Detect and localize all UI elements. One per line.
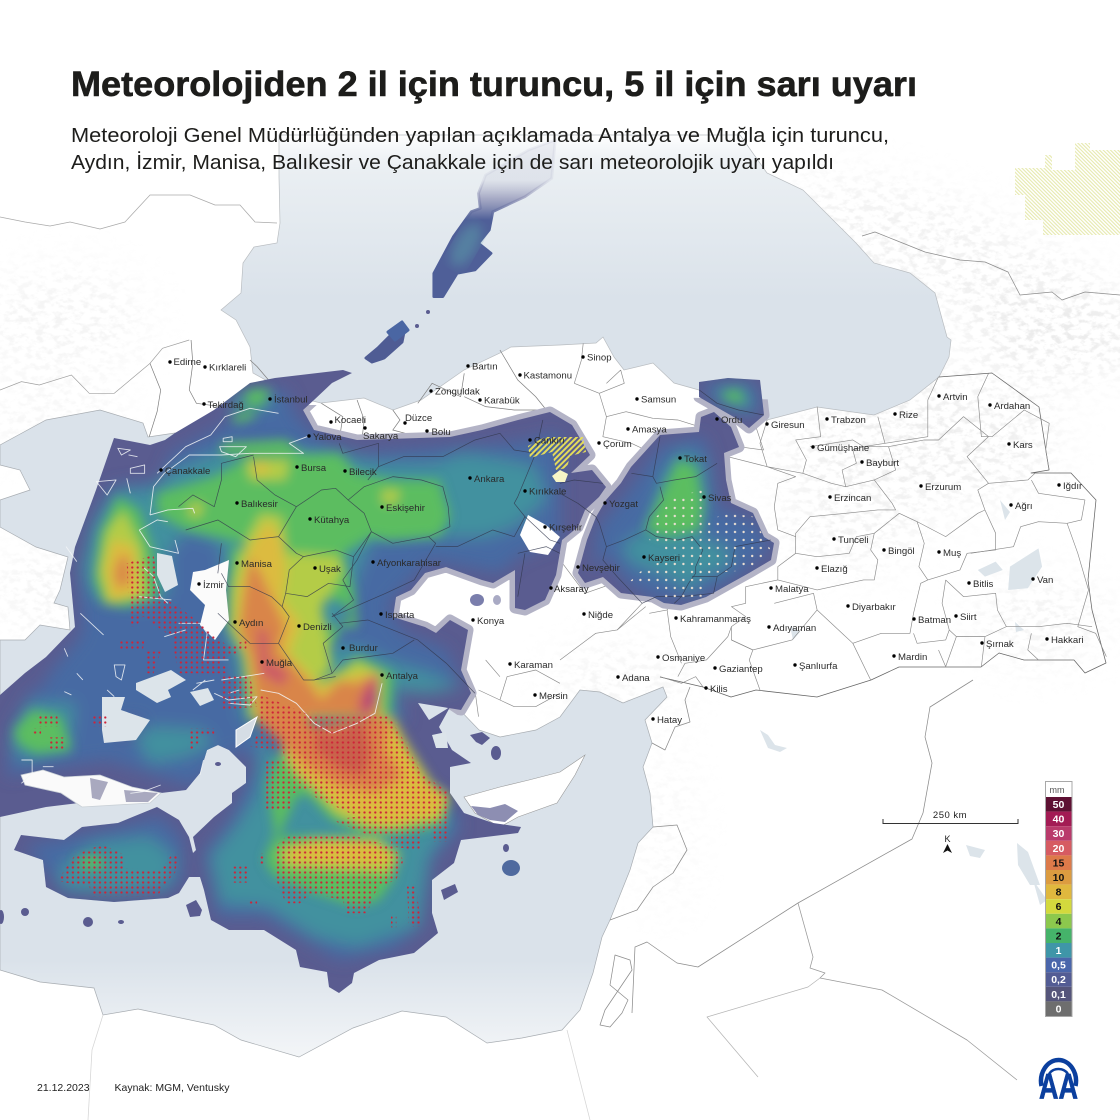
city labels: Erzurum — [925, 482, 961, 493]
city labels: Ordu — [721, 415, 742, 426]
city labels: Isparta — [385, 610, 415, 621]
central dry gap — [520, 515, 560, 555]
city labels: Kastamonu — [524, 370, 572, 382]
legend: precipitation scale in mm: 8 — [1056, 887, 1062, 899]
eastern province borders — [560, 343, 1106, 690]
city labels: Batman — [918, 615, 951, 626]
city labels: Bingöl — [888, 546, 915, 557]
city labels: Bayburt — [866, 458, 899, 469]
city labels: Karabük — [484, 396, 520, 406]
AA logo: AA — [1039, 1068, 1078, 1106]
city labels: Siirt — [960, 612, 977, 623]
city labels: Tekirdağ — [208, 400, 244, 411]
city labels: Kayseri — [648, 553, 680, 564]
city labels: Ardahan — [994, 401, 1030, 412]
city labels: Erzincan — [834, 493, 871, 504]
scale bar — [883, 810, 1018, 824]
city labels: Rize — [899, 410, 918, 421]
city labels: Kocaeli — [334, 415, 366, 426]
city labels: Yozgat — [609, 499, 638, 510]
legend: precipitation scale in mm: 10 — [1053, 872, 1064, 884]
yellow band — [105, 463, 446, 863]
city labels: Niğde — [588, 610, 613, 621]
north arrow: K — [944, 834, 951, 844]
city labels: Sinop — [587, 352, 612, 364]
city labels: Kahramanmaraş — [680, 614, 751, 625]
city labels: Gümüşhane — [817, 443, 869, 454]
city labels: Antalya — [386, 671, 419, 682]
city labels: Aksaray — [554, 584, 589, 595]
city labels: Eskişehir — [386, 503, 426, 514]
north arrow — [943, 834, 952, 853]
city labels: Zonguldak — [435, 386, 480, 398]
yellow hatched warning area over Çankırı — [528, 437, 586, 470]
legend: precipitation scale in mm: 0,1 — [1051, 989, 1066, 1001]
orange band — [114, 557, 404, 793]
city labels: Bursa — [301, 463, 327, 474]
city labels: Kırşehir — [549, 522, 583, 534]
legend: precipitation scale in mm: 4 — [1056, 916, 1062, 928]
magenta core — [364, 683, 377, 712]
western Anatolia dry land — [190, 560, 229, 640]
city labels: Muş — [943, 548, 961, 559]
city labels: Burdur — [349, 643, 379, 654]
city labels: Çorum — [603, 439, 632, 450]
city labels: Ankara — [474, 474, 505, 485]
city labels: Kilis — [710, 684, 728, 695]
province borders over precipitation — [179, 420, 560, 693]
Mediterranean and Aegean Sea — [0, 410, 667, 1057]
Black Sea — [221, 135, 951, 420]
southern province borders on white land — [446, 660, 560, 717]
subtitle line two: Aydın, İzmir, Manisa, Balıkesir ve Çanakkale için de sarı meteorolojik uyarı yapıldı — [71, 151, 834, 174]
yellow-green band — [98, 460, 450, 873]
city labels: Edirne — [174, 357, 201, 368]
teal band — [11, 387, 753, 947]
pale warning dots over Sivas and Kayseri — [630, 490, 770, 598]
city labels: Malatya — [775, 584, 809, 595]
Black Sea precipitation streak — [366, 140, 555, 362]
green band — [14, 390, 746, 907]
subtitle line one: Meteoroloji Genel Müdürlüğünden yapılan açıklamada Antalya ve Muğla için turuncu, — [71, 124, 889, 147]
city labels: Amasya — [632, 424, 667, 436]
red warning dots — [34, 556, 450, 928]
legend: precipitation scale in mm: 0,2 — [1051, 974, 1066, 986]
legend: precipitation scale in mm: 0,5 — [1051, 960, 1066, 972]
city labels: Çanakkale — [165, 466, 210, 477]
city labels: Denizli — [303, 622, 332, 633]
precipitation layer — [0, 140, 774, 993]
Cyprus — [464, 755, 585, 827]
AA logo — [1039, 1060, 1078, 1106]
land fringe of precipitation — [303, 398, 780, 716]
city labels: Şırnak — [986, 639, 1014, 650]
legend: precipitation scale in mm: 30 — [1053, 828, 1064, 840]
city labels: Kütahya — [314, 515, 350, 526]
city labels: Kırklareli — [209, 362, 246, 374]
legend: precipitation scale in mm: 2 — [1056, 930, 1062, 942]
city labels: Osmaniye — [662, 653, 705, 664]
legend: precipitation scale in mm: 40 — [1053, 814, 1064, 826]
city labels: Şanlıurfa — [799, 661, 838, 672]
legend: precipitation scale in mm: mm — [1050, 785, 1064, 795]
city labels: Karaman — [514, 660, 553, 671]
city labels: Tokat — [684, 454, 707, 465]
scale bar: 250 km — [933, 810, 967, 821]
city labels: Çankırı — [534, 436, 565, 446]
city labels: İstanbul — [274, 394, 308, 406]
bright white patch near Çankırı — [552, 470, 568, 482]
city labels: Balıkesir — [241, 499, 279, 510]
city labels: Ağrı — [1015, 501, 1033, 512]
city labels: Bolu — [432, 427, 451, 438]
city labels: Hakkari — [1051, 635, 1084, 646]
city labels: Artvin — [943, 392, 968, 403]
city labels: Kars — [1013, 440, 1033, 451]
city labels: Uşak — [319, 564, 341, 575]
legend: precipitation scale in mm: 0 — [1056, 1003, 1062, 1015]
city labels: Yalova — [313, 432, 342, 443]
city labels: Gaziantep — [719, 664, 763, 675]
city labels: Muğla — [266, 658, 293, 669]
red band — [257, 627, 379, 777]
city labels: Hatay — [657, 715, 682, 726]
city labels: Elazığ — [821, 564, 848, 575]
legend: precipitation scale in mm: 15 — [1053, 857, 1064, 869]
Cyprus rain fringe — [471, 804, 518, 822]
precipitation base shape — [0, 370, 774, 993]
city labels: Manisa — [241, 559, 273, 570]
legend: precipitation scale in mm: 6 — [1056, 901, 1062, 913]
Thrace borders — [0, 340, 546, 440]
pale hatched warning area, top right — [1015, 143, 1120, 235]
city labels: Bitlis — [973, 579, 993, 590]
city labels: Iğdır — [1063, 481, 1083, 492]
city labels: Trabzon — [831, 415, 866, 426]
legend: precipitation scale in mm: 1 — [1056, 945, 1062, 957]
legend: precipitation scale in mm — [1046, 782, 1072, 1016]
city labels: İzmir — [203, 580, 225, 591]
city labels: Bilecik — [349, 467, 377, 478]
land relief texture — [6, 188, 1120, 696]
city labels: Konya — [477, 616, 505, 627]
title: Meteorolojiden 2 il için turuncu, 5 il için sarı uyarı — [71, 65, 917, 104]
city labels: Sakarya — [363, 431, 399, 442]
white coast and island outlines — [21, 408, 382, 793]
Rhodes — [236, 717, 257, 747]
city labels: Düzce — [405, 413, 432, 424]
city labels: Diyarbakır — [852, 602, 897, 613]
date: 21.12.2023 — [37, 1082, 90, 1094]
city labels: Bartın — [472, 362, 498, 372]
blue band — [7, 383, 771, 960]
city labels: Giresun — [771, 420, 805, 431]
city labels — [159, 352, 1084, 726]
city labels: Tunceli — [838, 535, 869, 546]
city labels: Sivas — [708, 493, 732, 504]
sea gaps in precipitation — [102, 553, 448, 748]
city labels: Aydın — [239, 618, 263, 629]
Crete — [21, 770, 161, 807]
city labels: Van — [1037, 575, 1053, 586]
lakes and rivers — [760, 500, 1047, 905]
city labels: Afyonkarahisar — [377, 558, 442, 569]
city labels: Nevşehir — [582, 563, 621, 574]
legend: precipitation scale in mm: 20 — [1053, 843, 1064, 855]
city labels: Adana — [622, 673, 650, 684]
city labels: Kırıkkale — [529, 486, 566, 498]
legend: precipitation scale in mm: 50 — [1053, 799, 1064, 811]
city labels: Adıyaman — [773, 623, 816, 634]
source: Kaynak: MGM, Ventusky — [114, 1082, 230, 1094]
separate small precipitation cells — [0, 594, 520, 927]
eastern province borders over precipitation — [560, 390, 771, 603]
city labels: Mardin — [898, 652, 927, 663]
colour bands — [7, 383, 771, 960]
city labels: Mersin — [539, 691, 568, 702]
city labels: Samsun — [641, 394, 676, 406]
